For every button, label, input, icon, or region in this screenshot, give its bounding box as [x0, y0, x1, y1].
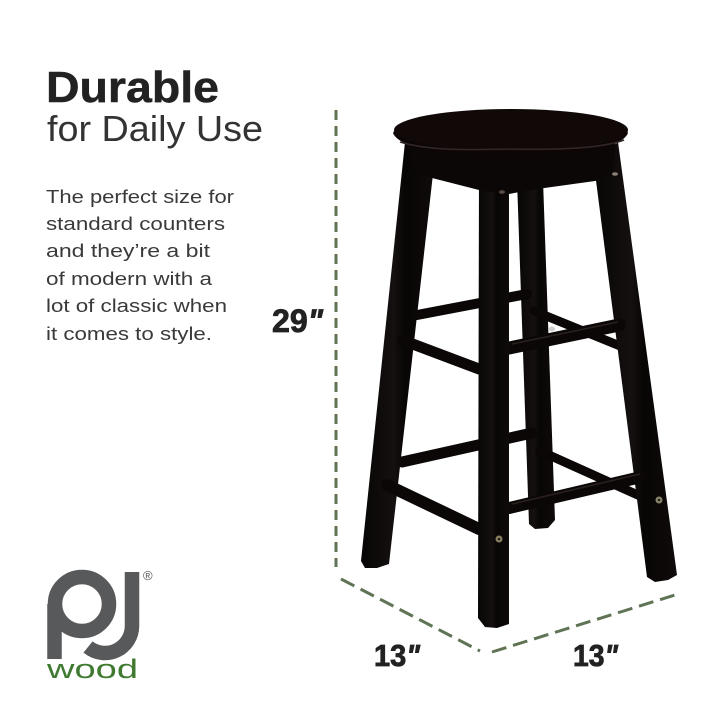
rung highlight	[512, 322, 640, 504]
seat	[393, 109, 628, 159]
description text: The perfect size for	[46, 187, 234, 207]
front rungs	[387, 325, 641, 529]
depth label: 13"	[573, 638, 619, 673]
title	[46, 63, 263, 149]
logo registered mark: ®	[143, 568, 153, 583]
apron	[408, 140, 616, 194]
bolts	[496, 172, 662, 542]
logo p	[54, 577, 109, 659]
front leg	[478, 170, 509, 628]
title: for Daily Use	[47, 108, 263, 149]
logo	[46, 568, 153, 684]
description text: standard counters	[46, 214, 225, 234]
back rungs	[402, 294, 640, 496]
logo j	[88, 572, 132, 653]
stool	[361, 109, 677, 628]
title: Durable	[46, 63, 219, 112]
width label: 13"	[374, 638, 421, 673]
logo wood: wood	[46, 654, 138, 684]
width dimension line	[341, 579, 480, 651]
height label: 29"	[272, 303, 324, 339]
description text: it comes to style.	[46, 324, 212, 344]
height dimension line	[334, 110, 338, 567]
description text	[46, 187, 234, 344]
back leg	[517, 180, 555, 529]
left leg	[361, 142, 434, 568]
depth dimension line	[492, 595, 675, 652]
description text: and they’re a bit	[46, 241, 210, 261]
right leg	[594, 142, 677, 582]
description text: of modern with a	[46, 269, 213, 289]
description text: lot of classic when	[46, 296, 227, 316]
